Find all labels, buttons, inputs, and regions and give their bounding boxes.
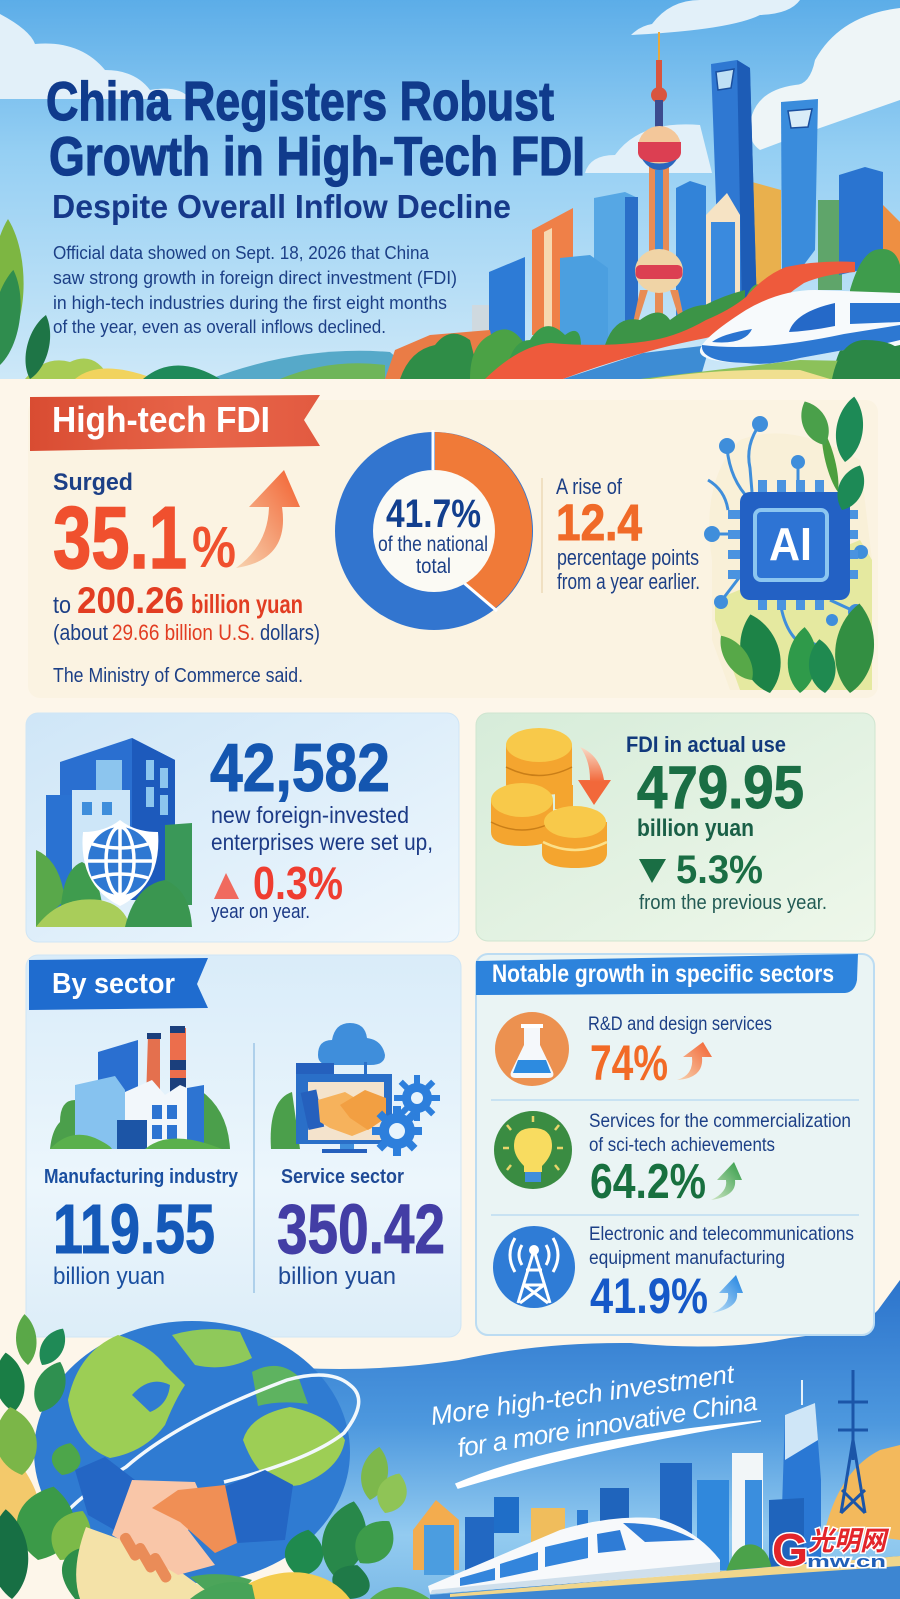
icon: building with globe <box>36 738 192 927</box>
underline swoosh <box>456 1421 761 1488</box>
intro paragraph: of the year, even as overall inflows declined. <box>53 317 386 337</box>
stat: 42,582: 42,582 <box>210 730 390 806</box>
icon: down arrow <box>578 747 611 805</box>
ribbon heading: By sector <box>52 968 175 1000</box>
footer blue wave <box>300 1280 900 1599</box>
back buildings <box>472 182 900 365</box>
title: Growth in High-Tech FDI <box>49 125 585 187</box>
right foliage <box>190 1445 430 1599</box>
row: sci-tech <box>494 1111 851 1209</box>
skyscraper: right tower <box>781 99 818 285</box>
usd amount: (about <box>53 620 108 645</box>
panel: new enterprises <box>26 713 459 942</box>
sand hill <box>76 1527 218 1599</box>
handshake <box>75 1457 293 1584</box>
sector: service: billion yuan <box>278 1263 396 1290</box>
icon: up arrow <box>236 470 300 568</box>
intro paragraph: saw strong growth in foreign direct investment (FDI) <box>53 268 457 288</box>
row: sci-tech: 64.2% <box>590 1155 706 1209</box>
city skyline <box>413 1370 900 1579</box>
surged stat: Surged <box>53 469 133 496</box>
surged stat: 35.1 <box>53 488 187 587</box>
logo: 光明网 <box>808 1526 890 1556</box>
title <box>46 70 585 187</box>
donut chart: of the national <box>378 533 488 556</box>
subtitle: Despite Overall Inflow Decline <box>52 188 511 225</box>
logo <box>772 1524 890 1576</box>
icon: AI chip: AI <box>769 518 812 570</box>
ring <box>40 1375 359 1543</box>
ribbon heading <box>30 395 320 451</box>
description: new foreign-invested <box>211 802 409 828</box>
donut chart <box>335 430 533 630</box>
sector: manufacturing <box>44 1166 239 1290</box>
header band <box>476 954 858 995</box>
amount: 200.26 <box>77 580 184 621</box>
rise stat: 12.4 <box>556 494 643 551</box>
usd amount <box>53 620 320 645</box>
rise stat <box>556 474 700 594</box>
oriental pearl tower <box>632 32 686 330</box>
right foreground bushes <box>832 340 900 379</box>
header illustration <box>0 0 900 382</box>
railway <box>430 1556 900 1599</box>
sector: manufacturing: billion yuan <box>53 1263 165 1290</box>
globe <box>34 1321 350 1592</box>
row: telecom: 41.9% <box>590 1268 708 1324</box>
unit: billion yuan <box>637 815 754 842</box>
usd amount: 29.66 billion U.S. <box>112 620 255 645</box>
ribbon heading: High-tech FDI <box>52 399 270 440</box>
footer illustration <box>0 1313 900 1599</box>
slogan: for a more innovative China <box>455 1386 759 1463</box>
ribbon heading <box>29 958 208 1010</box>
high speed train <box>700 290 900 364</box>
intro paragraph <box>53 243 457 337</box>
skyscraper: mid towers <box>489 181 740 345</box>
panel: by sector <box>26 955 461 1337</box>
stat: 0.3% up: 0.3% <box>253 857 343 909</box>
slogan: More high-tech investment <box>429 1358 738 1431</box>
row: R&D: 74% <box>590 1035 668 1091</box>
slogan <box>429 1358 759 1463</box>
panel: FDI in actual use <box>476 713 875 941</box>
icon: coins <box>491 728 607 868</box>
icon: factory <box>50 1026 230 1149</box>
row: sci-tech: Services for the commercialization <box>589 1111 851 1132</box>
row: sci-tech: of sci-tech achievements <box>589 1135 775 1156</box>
sector: service: Service sector <box>281 1166 404 1188</box>
icon: service handshake <box>271 1023 440 1156</box>
stat: 0.3% up <box>214 857 343 909</box>
train <box>428 1518 720 1594</box>
logo: mw.cn <box>807 1552 886 1571</box>
description: enterprises were set up, <box>211 829 433 855</box>
heading: FDI in actual use <box>626 732 786 757</box>
sector: manufacturing: Manufacturing industry <box>44 1166 239 1188</box>
amount: to <box>53 592 71 619</box>
sector: service: 350.42 <box>277 1190 445 1268</box>
left leaves <box>0 219 56 382</box>
donut chart: total <box>416 555 451 578</box>
amount <box>53 580 303 621</box>
amount: billion yuan <box>191 589 303 619</box>
left foliage <box>0 1313 130 1599</box>
source note: The Ministry of Commerce said. <box>53 665 303 687</box>
panel: notable growth <box>476 954 874 1335</box>
header band: Notable growth in specific sectors <box>492 960 834 988</box>
icon: AI chip <box>704 395 879 698</box>
skyscraper: tall tower <box>711 60 757 310</box>
row: R&D <box>495 1012 772 1091</box>
sector: service <box>277 1166 445 1290</box>
rise stat: A rise of <box>556 474 623 499</box>
row: R&D: R&D and design services <box>588 1014 772 1035</box>
sector: manufacturing: 119.55 <box>53 1190 215 1268</box>
caption: from the previous year. <box>639 892 827 914</box>
red ribbon road <box>485 262 855 379</box>
row: telecom <box>493 1224 854 1324</box>
row: telecom: equipment manufacturing <box>589 1248 785 1269</box>
clouds <box>0 0 900 173</box>
logo: G <box>772 1524 808 1576</box>
intro paragraph: in high-tech industries during the first eight months <box>53 293 447 313</box>
green hills <box>25 249 900 379</box>
stat: 479.95: 479.95 <box>637 754 804 821</box>
donut chart: 41.7% <box>386 492 481 536</box>
intro paragraph: Official data showed on Sept. 18, 2026 that China <box>53 243 430 263</box>
surged stat: % <box>192 515 236 580</box>
stat: 5.3% down <box>639 848 763 892</box>
panel: high-tech FDI <box>28 395 879 698</box>
stat: 5.3% down: 5.3% <box>676 848 763 892</box>
usd amount: dollars) <box>260 620 320 645</box>
rise stat: from a year earlier. <box>557 569 700 594</box>
river and fields <box>563 345 900 379</box>
rise stat: percentage points <box>557 545 699 570</box>
description <box>211 802 433 855</box>
caption: year on year. <box>211 901 310 923</box>
title: China Registers Robust <box>46 70 554 132</box>
skyscraper: far right <box>839 167 883 275</box>
row: telecom: Electronic and telecommunications <box>589 1224 854 1245</box>
